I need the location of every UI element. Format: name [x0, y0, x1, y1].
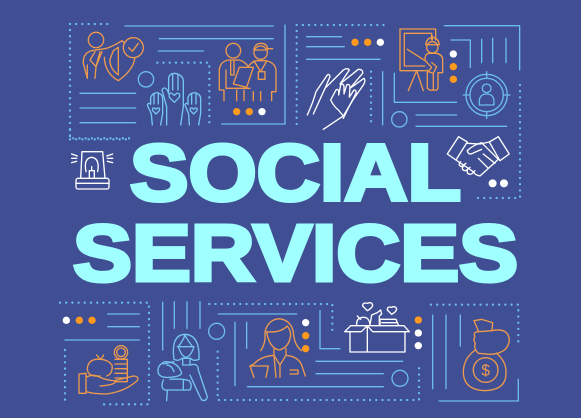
icon: money bag held by hand: $ — [481, 362, 490, 379]
icon: money bag held by hand — [463, 319, 509, 391]
title: SERVICES: SERVICES — [73, 208, 518, 298]
status dots — [489, 179, 508, 187]
panel: bottom left — [60, 302, 305, 404]
icon: two workers with clipboard — [219, 43, 276, 101]
icon: donation box with hearts — [345, 303, 409, 352]
title: SOCIAL: SOCIAL — [130, 128, 461, 217]
status dots — [302, 316, 422, 352]
status dots — [63, 317, 96, 324]
icon: woman with baby — [158, 334, 207, 401]
icon: woman at desk — [250, 319, 305, 377]
icon: businessman with shield — [83, 32, 143, 81]
icon: hand holding apple and coins — [79, 346, 138, 394]
panel: top right — [297, 25, 520, 129]
icon: engineer at presentation board — [400, 29, 443, 91]
icon: target with person — [463, 72, 510, 118]
icon: handshake — [447, 137, 509, 176]
icon: helping hands — [307, 69, 365, 129]
icon: emergency siren — [72, 152, 113, 189]
status dots — [351, 39, 457, 83]
panel: bottom right — [290, 303, 518, 401]
icon: raised hands with hearts — [147, 73, 201, 125]
dotted frame: right — [476, 85, 520, 198]
middle icons — [70, 130, 509, 189]
panel: top left — [70, 24, 285, 138]
status dots — [233, 108, 266, 115]
